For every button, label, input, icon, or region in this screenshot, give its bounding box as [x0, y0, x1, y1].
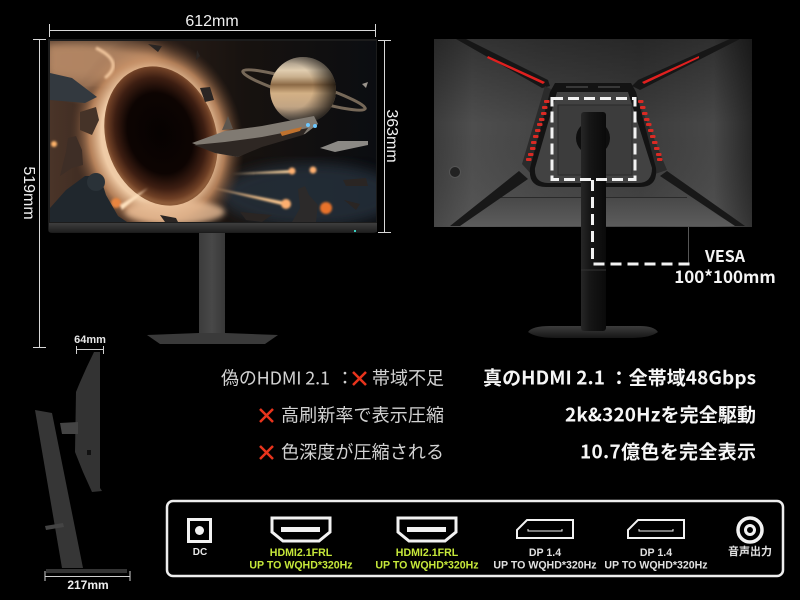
comparison: fake HDMI: 帯域不足: [372, 364, 444, 390]
front monitor: [48, 39, 377, 344]
rear monitor: [434, 39, 752, 338]
asteroid: [80, 107, 99, 135]
port: HDMI 2: HDMI2.1FRL: [396, 547, 459, 559]
dimension: height 519mm: 519mm: [20, 166, 37, 220]
soldier foreground: [50, 176, 127, 222]
laser beams: [51, 141, 332, 214]
rear panel: [434, 39, 752, 227]
port: DP 1: DP 1.4: [529, 547, 561, 559]
comparison: fake HDMI: 偽のHDMI 2.1: [221, 364, 330, 390]
black hole: [104, 66, 218, 206]
soldier left small: [60, 136, 83, 176]
port: HDMI 1: HDMI2.1FRL: [270, 547, 333, 559]
port: HDMI 2: UP TO WQHD*320Hz: [375, 560, 479, 572]
comparison: true HDMI: [483, 364, 756, 464]
debris: [148, 44, 368, 222]
rear base: [528, 326, 658, 338]
lower black struts: [450, 171, 745, 226]
port: HDMI 2: [375, 518, 479, 572]
red accent stripes: [456, 39, 740, 90]
dimension: base 217mm: [45, 571, 130, 592]
led side right: [638, 100, 662, 161]
monitor stand neck: [199, 232, 225, 334]
planet ring: [241, 68, 367, 112]
comparison: fake HDMI: 高刷新率で表示圧縮: [281, 402, 444, 428]
large spaceship: [192, 116, 318, 157]
side stand: [35, 410, 83, 568]
monitor bezel: [48, 39, 377, 233]
portal glow: [74, 41, 242, 222]
vents: [566, 86, 620, 88]
VESA label: VESA: [704, 243, 746, 267]
planet: [270, 57, 336, 123]
power led: [354, 230, 356, 232]
port: DC: [188, 520, 210, 558]
port: HDMI 1: [249, 518, 353, 572]
center module: [530, 83, 656, 187]
cable clip: [45, 523, 64, 530]
side panel: [75, 352, 102, 492]
side port: [87, 450, 91, 455]
comparison: fake HDMI: ：: [336, 364, 354, 390]
mount plate: [558, 105, 632, 175]
port: audio: [728, 518, 772, 559]
red cross marks: [260, 372, 366, 459]
dimension: panel height 363mm: 363mm: [383, 109, 400, 163]
side monitor: [35, 352, 127, 573]
panel: ports: [167, 501, 783, 576]
comparison: true HDMI: 10.7億色を完全表示: [580, 438, 756, 464]
comparison: fake HDMI: 色深度が圧縮される: [281, 438, 444, 464]
soldier right: [292, 186, 318, 222]
port: HDMI 1: UP TO WQHD*320Hz: [249, 560, 353, 572]
comparison: fake HDMI: [221, 364, 444, 464]
dimension: width 612mm: 612mm: [185, 13, 239, 30]
monitor stand base: [147, 333, 278, 344]
hinge disc: [576, 121, 610, 155]
VESA dashed guide: [552, 98, 690, 264]
side base: [46, 569, 127, 573]
joystick: [450, 166, 460, 178]
rear lower panel: [450, 197, 736, 226]
port: DP 1: [493, 520, 597, 572]
dimension: base 217mm: 217mm: [67, 578, 109, 592]
port: DC: DC: [193, 547, 207, 558]
comparison: true HDMI: 2k&320Hzを完全駆動: [565, 400, 756, 428]
dimension: height 519mm: [20, 40, 46, 348]
dimension: width 612mm: [50, 13, 376, 37]
VESA label: [674, 243, 776, 288]
dimension: panel height 363mm: [378, 40, 400, 232]
led side left: [526, 100, 550, 161]
port: DP 2: DP 1.4: [640, 547, 672, 559]
comparison: true HDMI: 真のHDMI 2.1 ：全帯域48Gbps: [483, 364, 756, 390]
dimension: depth 64mm: [74, 334, 106, 354]
port: DP 1: UP TO WQHD*320Hz: [493, 560, 597, 572]
port: DP 2: UP TO WQHD*320Hz: [604, 560, 708, 572]
screen artwork: [50, 41, 376, 222]
VESA label: 100*100mm: [674, 263, 776, 288]
port: DP 2: [604, 520, 708, 572]
dimension: depth 64mm: 64mm: [74, 334, 106, 346]
stand pillar: [581, 112, 606, 331]
side hinge: [60, 422, 78, 434]
LED side bands: [522, 86, 667, 175]
left spaceship: [50, 73, 97, 103]
small spaceship: [320, 141, 368, 152]
bezel chin: [49, 223, 377, 232]
port: audio: 音声出力: [728, 543, 772, 559]
